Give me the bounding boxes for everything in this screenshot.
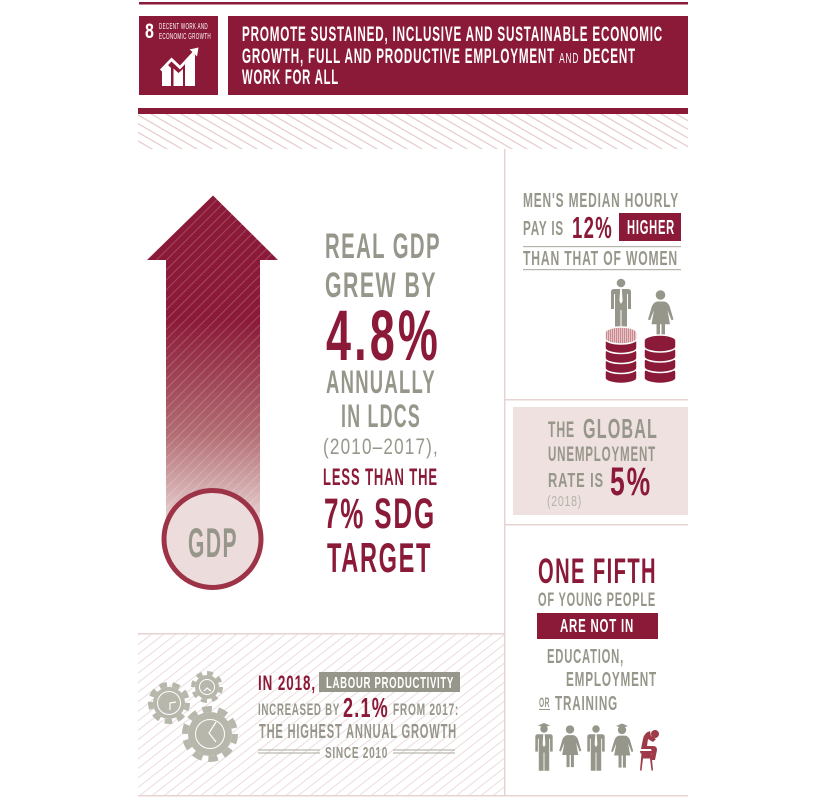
panel: young people: ONE FIFTH — [538, 552, 657, 591]
icon: growth chart — [160, 48, 198, 86]
GDP growth text: 4.8% — [326, 297, 441, 376]
panel: labour productivity: SINCE 2010 — [325, 745, 388, 762]
GDP growth text: REAL GDP — [325, 227, 441, 266]
icon: man on coins — [605, 279, 637, 384]
panel: global unemployment: 5% — [610, 460, 652, 504]
panel: young people: EMPLOYMENT — [566, 669, 657, 691]
GDP growth text: IN LDCS — [341, 398, 421, 434]
panel: young people: ARE NOT IN — [560, 616, 634, 636]
SDG 8 badge: ECONOMIC GROWTH — [159, 32, 211, 41]
panel: gender pay gap: MEN'S MEDIAN HOURLY — [523, 190, 679, 212]
panel: global unemployment: (2018) — [547, 493, 582, 510]
GDP growth text: GREW BY — [325, 266, 437, 305]
panel: young people: OR — [539, 694, 550, 710]
panel: gender pay gap: HIGHER — [627, 217, 675, 239]
panel dividers — [138, 149, 688, 796]
panel: global unemployment: GLOBAL — [583, 413, 658, 444]
panel: young people: TRAINING — [555, 693, 618, 715]
icon: GDP arrow — [147, 196, 278, 588]
title banner — [228, 16, 688, 95]
GDP growth text: TARGET — [327, 534, 432, 581]
title banner: WORK FOR ALL — [242, 66, 339, 89]
icon: five young people — [535, 723, 659, 771]
GDP growth text: 7% SDG — [324, 490, 436, 538]
top rule — [139, 2, 688, 4]
panel: global unemployment: THE — [548, 417, 575, 442]
panel: labour productivity: INCREASED BY — [258, 700, 340, 719]
SDG 8 badge: DECENT WORK AND — [159, 22, 208, 31]
panel: young people — [535, 552, 659, 771]
panel: labour productivity: LABOUR PRODUCTIVITY — [326, 675, 454, 692]
panel: global unemployment: UNEMPLOYMENT — [548, 443, 656, 466]
panel: global unemployment: RATE IS — [548, 470, 604, 492]
icon: seated young person — [640, 730, 659, 770]
SDG 8 badge: 8 — [145, 20, 155, 43]
panel: young people: OF YOUNG PEOPLE — [538, 590, 656, 611]
panel: young people: EDUCATION, — [547, 646, 624, 668]
title banner: GROWTH, FULL AND PRODUCTIVE EMPLOYMENT AND DECENT — [242, 45, 636, 68]
GDP growth text: ANNUALLY — [326, 364, 436, 400]
hatch band — [138, 114, 688, 149]
panel: gender pay gap: 12% — [572, 210, 613, 245]
panel: gender pay gap: PAY IS — [523, 218, 564, 240]
icon: gears — [150, 673, 235, 759]
SDG 8 badge — [139, 16, 218, 95]
panel: labour productivity: IN 2018, — [258, 672, 316, 695]
GDP label: GDP — [188, 519, 238, 566]
panel: gender pay gap: THAN THAT OF WOMEN — [523, 248, 678, 270]
panel: labour productivity — [138, 634, 504, 795]
GDP growth text: (2010–2017), — [323, 434, 439, 459]
panel: labour productivity: FROM 2017: — [393, 700, 459, 719]
panel: global unemployment — [513, 407, 688, 515]
header bar — [138, 108, 688, 114]
GDP growth text — [323, 227, 441, 581]
icon: woman on coins — [644, 290, 676, 384]
panel: labour productivity: THE HIGHEST ANNUAL GROWTH — [259, 721, 457, 743]
GDP growth text: LESS THAN THE — [323, 464, 438, 491]
panel: labour productivity: 2.1% — [343, 692, 389, 723]
panel: gender pay gap — [523, 190, 681, 384]
